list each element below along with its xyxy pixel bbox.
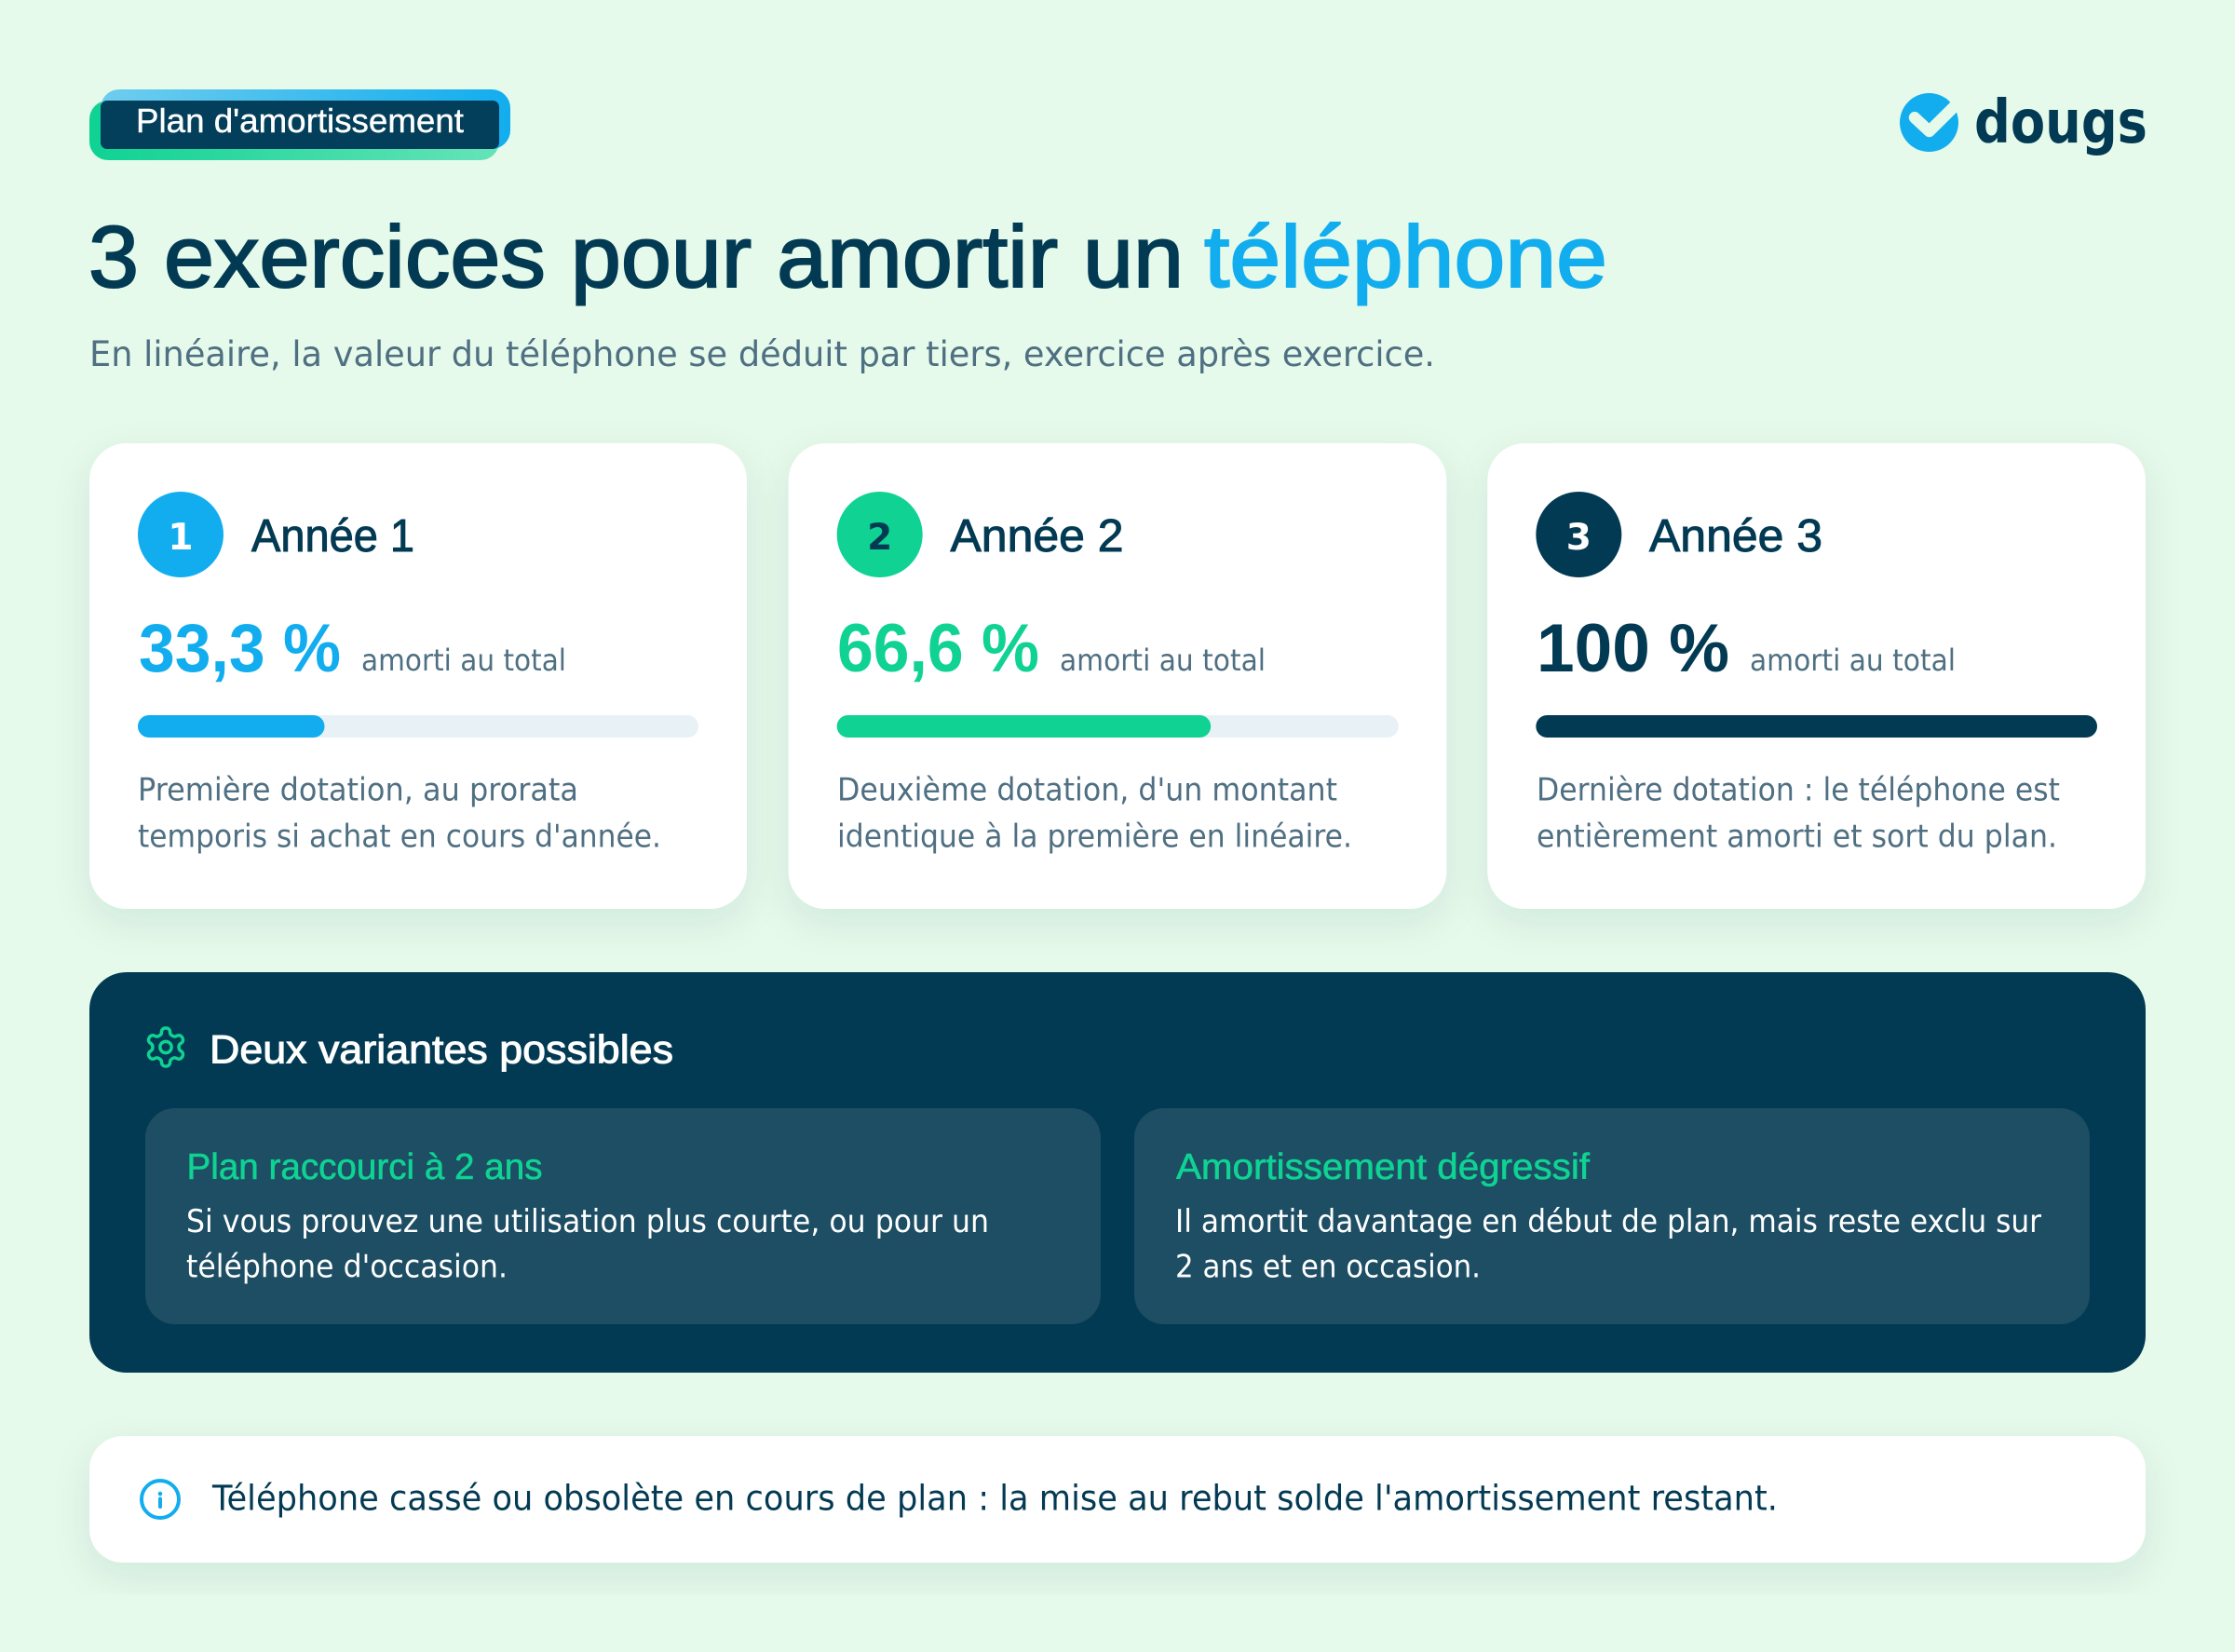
card: amortissement dégressif: Amortissement dégressif	[1176, 1147, 1590, 1187]
value: 100 %: 100 %	[1537, 611, 1729, 686]
subtitle: En linéaire, la valeur du téléphone se déduit par tiers, exercice après exercice.	[89, 334, 1435, 374]
description	[138, 771, 661, 855]
heading: année 3: Année 3	[1649, 511, 1822, 562]
description	[837, 771, 1352, 855]
card: plan raccourci à 2 ans: Plan raccourci à 2 ans	[186, 1147, 542, 1187]
progress bar 100 %	[1536, 715, 2097, 738]
logo: dougs	[1900, 88, 2147, 157]
panel: année 1	[89, 443, 747, 909]
caption: amorti au total	[1060, 643, 1266, 678]
progress bar 66,6 %	[837, 715, 1399, 738]
icon: info	[142, 1481, 179, 1518]
badge: Plan d'amortissement: Plan d'amortissement	[136, 102, 464, 140]
step number 1: 1	[168, 517, 194, 559]
caption: amorti au total	[361, 643, 566, 678]
value: 33,3 %: 33,3 %	[139, 611, 341, 686]
heading: année 2: Année 2	[950, 511, 1123, 562]
title: téléphone	[1204, 208, 1607, 305]
heading: année 1: Année 1	[251, 511, 414, 562]
title: 3 exercices pour amortir un	[88, 208, 1184, 305]
step number 2	[837, 492, 923, 577]
card: amortissement dégressif: Il amortit davantage en début de plan, mais reste exclu sur	[1175, 1203, 2041, 1240]
step number 3	[1536, 492, 1621, 577]
description: Dernière dotation : le téléphone est	[1537, 771, 2060, 808]
step number 1	[138, 492, 224, 577]
panel: deux variantes possibles	[89, 972, 2146, 1373]
progress bar 33,3 %	[138, 715, 698, 738]
badge: Plan d'amortissement	[89, 89, 510, 160]
step number 3: 3	[1566, 517, 1592, 559]
caption: amorti au total	[1750, 643, 1956, 678]
description: Deuxième dotation, d'un montant	[837, 771, 1337, 808]
value: 66,6 %: 66,6 %	[837, 611, 1039, 686]
title	[88, 208, 1607, 305]
description: entièrement amorti et sort du plan.	[1537, 818, 2057, 855]
panel: note	[89, 1436, 2146, 1563]
card: amortissement dégressif	[1134, 1108, 2090, 1324]
description	[1537, 771, 2060, 855]
logo: dougs: dougs	[1974, 88, 2147, 157]
description: temporis si achat en cours d'année.	[138, 818, 661, 855]
icon: gear	[149, 1028, 183, 1066]
card: plan raccourci à 2 ans: Si vous prouvez une utilisation plus courte, ou pour un	[186, 1203, 989, 1240]
note text: Téléphone cassé ou obsolète en cours de plan : la mise au rebut solde l'amortissement restant.	[211, 1479, 1778, 1518]
card: plan raccourci à 2 ans	[145, 1108, 1101, 1324]
card: amortissement dégressif: 2 ans et en occasion.	[1175, 1248, 1481, 1285]
heading: deux variantes: Deux variantes possibles	[210, 1028, 673, 1073]
step number 2: 2	[867, 517, 892, 559]
panel: année 2	[789, 443, 1446, 909]
card: plan raccourci à 2 ans: téléphone d'occasion.	[186, 1248, 508, 1285]
description: Première dotation, au prorata	[138, 771, 578, 808]
panel: année 3	[1487, 443, 2146, 909]
description: identique à la première en linéaire.	[837, 818, 1352, 855]
